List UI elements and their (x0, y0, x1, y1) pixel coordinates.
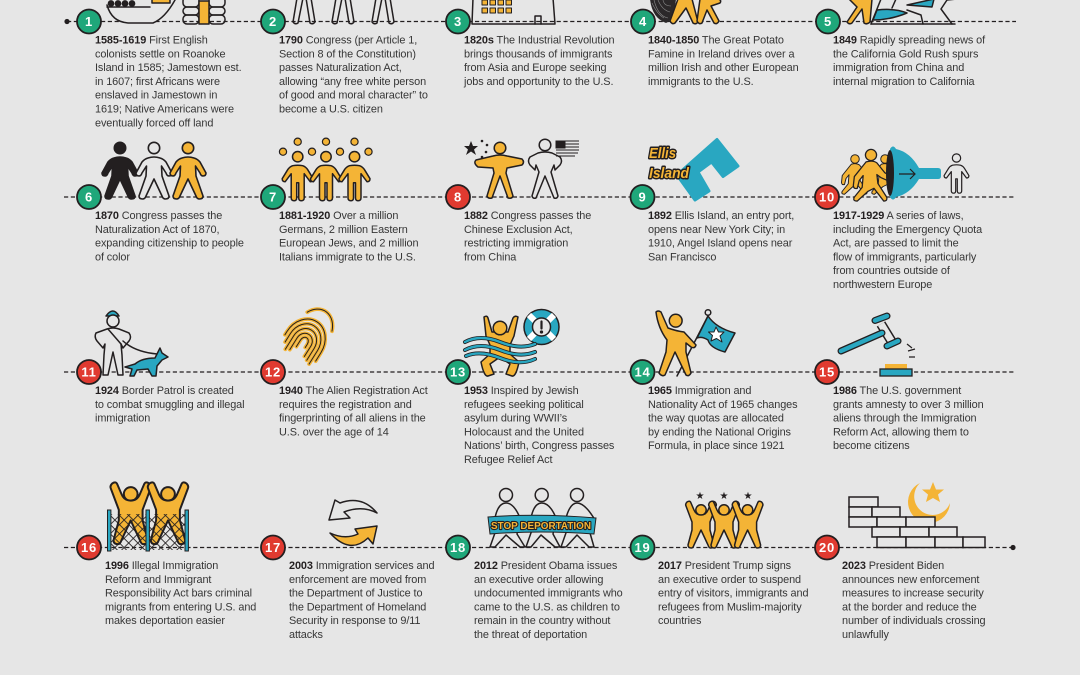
text: 1790: allowing “any free white person (279, 76, 426, 88)
text: 1881-1920: Germans, 2 million Eastern (279, 224, 408, 236)
number marker 12: 12 (265, 364, 281, 380)
icon: swimmer and lifebuoy (465, 310, 559, 376)
text: 1917-1929: including the Emergency Quota (833, 224, 983, 236)
text: 2012: undocumented immigrants who (474, 588, 623, 600)
text: 1996: Reform and Immigrant (105, 574, 211, 586)
text: 1965: 1965 Immigration and (648, 385, 751, 397)
text: 1585-1619: eventually forced off land (95, 117, 213, 129)
text: 1881-1920: 1881-1920 Over a million (279, 210, 398, 222)
number marker 17 (261, 536, 285, 560)
icon: potato blight and walkers (650, 0, 721, 24)
text: 1940: requires the registration and (279, 399, 412, 411)
icon: border patrol and dog (95, 311, 168, 376)
number marker 2 (261, 10, 285, 34)
icon: three people with stars (686, 491, 763, 548)
number marker 6 (77, 185, 101, 209)
text: 1585-1619: in 1607; first Africans were (95, 76, 220, 88)
number marker 3: 3 (454, 14, 462, 29)
text: 1996: Responsibility Act bars criminal (105, 588, 252, 600)
text: 2003: 2003 Immigration services and (289, 560, 434, 572)
text: 2023: 2023 President Biden (842, 560, 944, 572)
text: 1986: become citizens (833, 440, 910, 452)
number marker 5 (816, 10, 840, 34)
icon: gavel (841, 316, 915, 376)
text: 2003: attacks (289, 629, 323, 641)
panel: event 1 (77, 0, 242, 129)
text: 1820s: 1820s The Industrial Revolution (464, 34, 614, 46)
number marker 6: 6 (85, 190, 93, 204)
text: 1924: to combat smuggling and illegal (95, 399, 244, 411)
icon: immigrants through a funnel (842, 146, 969, 201)
text: 2023: at the border and reduce the (842, 601, 977, 613)
icon: ship and crates (107, 0, 225, 24)
text: 1917-1929: from countries outside of (833, 265, 951, 277)
text: 1849: immigration from China and (833, 62, 964, 74)
number marker 15 (815, 360, 839, 384)
number marker 20 (815, 536, 839, 560)
text: 1790: passes Naturalization Act, (279, 62, 402, 74)
text: 1840-1850: immigrants to the U.S. (648, 76, 754, 88)
panel: event 11 (77, 311, 244, 425)
number marker 11: 11 (81, 364, 97, 380)
text: 2012: came to the U.S. as children to (474, 601, 620, 613)
text: 1820s: jobs and opportunity to the U.S. (463, 76, 613, 88)
icon: Ellis Island: Ellis (649, 145, 676, 162)
panel: event 9 (630, 140, 794, 263)
panel: event 12 (261, 300, 428, 438)
number marker 3 (446, 10, 470, 34)
text: 1820s: from Asia and Europe seeking (464, 62, 607, 74)
number marker 19: 19 (634, 540, 651, 555)
panel: event 13 (446, 310, 615, 466)
number marker 18 (446, 536, 470, 560)
icon: crowd (279, 138, 372, 201)
text: 1585-1619: enslaved in Jamestown in (95, 90, 217, 102)
text: 1924: 1924 Border Patrol is created (95, 385, 234, 397)
timeline row 3 (64, 371, 1016, 373)
text: 1790: 1790 Congress (per Article 1, (279, 34, 417, 46)
text: 1917-1929: 1917-1929 A series of laws, (833, 210, 964, 222)
text: 1940: 1940 The Alien Registration Act (279, 385, 428, 397)
panel: event 17 (261, 500, 434, 641)
text: 1881-1920: Italians immigrate to the U.S. (279, 251, 416, 263)
icon: factory (472, 0, 555, 24)
text: 1917-1929: flow of immigrants, particularly (833, 251, 977, 263)
panel: event 5 (816, 0, 986, 88)
number marker 4 (631, 10, 655, 34)
panel: event 3 (446, 0, 615, 88)
panel: event 6 (77, 142, 244, 263)
number marker 8 (446, 185, 470, 209)
text: 2003: enforcement are moved from (289, 574, 426, 586)
number marker 14 (630, 360, 654, 384)
text: 1892: 1892 Ellis Island, an entry port, (648, 210, 794, 222)
text: 1892: San Francisco (648, 251, 716, 263)
text: 1585-1619: 1619; Native Americans were (95, 104, 234, 116)
text: 1585-1619: colonists settle on Roanoke (95, 48, 226, 60)
text: 2012: an executive order allowing (474, 574, 603, 586)
number marker 20: 20 (819, 540, 835, 555)
panel: event 19 (630, 491, 808, 627)
text: 2012: 2012 President Obama issues (474, 560, 617, 572)
text: 1996: migrants from entering U.S. and (105, 601, 256, 613)
text: 1996: 1996 Illegal Immigration (105, 560, 218, 572)
icon: Ellis Island (649, 140, 738, 200)
panel: event 18 (446, 488, 623, 641)
number marker 10 (815, 185, 839, 209)
number marker 9: 9 (638, 190, 647, 204)
text: 1849: internal migration to California (833, 76, 976, 88)
text: 1790: Section 8 of the Constitution) (279, 48, 416, 60)
text: 1849: the California Gold Rush spurs (833, 48, 979, 60)
text: 1790: of good and moral character” to (279, 90, 428, 102)
text: 1986: 1986 The U.S. government (833, 385, 961, 397)
text: 1986: grants amnesty to over 3 million (833, 399, 984, 411)
number marker 13: 13 (450, 364, 466, 380)
text: 2012: the threat of deportation (474, 629, 587, 641)
icon: people behind fence (108, 482, 188, 551)
icon: gold rush (847, 0, 957, 24)
text: 1882: 1882 Congress passes the (464, 210, 591, 222)
text: 1585-1619: Island in 1585; Jamestown est. (95, 62, 242, 74)
text: 1917-1929: Act, are passed to limit the (833, 238, 959, 250)
text: 1940: fingerprinting of all aliens in the (279, 413, 426, 425)
text: 1881-1920: European Jews, and 2 million (279, 238, 419, 250)
icon: protest banner (488, 488, 596, 547)
icon: Ellis Island: Island (649, 165, 690, 182)
text: 1917-1929: northwestern Europe (833, 279, 932, 291)
text: 1870: 1870 Congress passes the (95, 210, 222, 222)
text: 1953: Nations’ birth, Congress passes (464, 440, 615, 452)
text: 1882: Chinese Exclusion Act, (464, 224, 573, 236)
text: 2017: refugees from Muslim-majority (658, 601, 802, 613)
number marker 13 (446, 360, 470, 384)
text: 1870: Naturalization Act of 1870, (95, 224, 220, 236)
text: 1840-1850: million Irish and other European (648, 62, 799, 74)
icon: fingerprint (279, 300, 341, 366)
text: 2023: announces new enforcement (842, 574, 979, 586)
number marker 7 (261, 185, 285, 209)
text: 1840-1850: Famine in Ireland drives over a (648, 48, 795, 60)
icon: person with flag (656, 310, 735, 376)
icon: three people with stars: ★ (696, 491, 705, 502)
text: 1870: expanding citizenship to people (95, 238, 244, 250)
icon: three people (102, 142, 206, 199)
text: 1965: the way quotas are allocated (648, 413, 784, 425)
icon: protest banner: STOP DEPORTATION (491, 521, 591, 532)
text: 1892: 1910, Angel Island opens near (648, 238, 793, 250)
text: 2023: number of individuals crossing (842, 615, 986, 627)
text: 1986: Reform Act, allowing them to (833, 426, 969, 438)
number marker 1 (77, 10, 101, 34)
number marker 2: 2 (269, 14, 277, 29)
icon: swap arrows (329, 500, 377, 545)
text: 1965: Nationality Act of 1965 changes (648, 399, 798, 411)
text: 2017: 2017 President Trump signs (658, 560, 791, 572)
timeline row 1 (64, 19, 1016, 24)
panel: event 7 (261, 138, 419, 263)
text: 1840-1850: 1840-1850 The Great Potato (648, 34, 784, 46)
number marker 16: 16 (81, 540, 97, 555)
timeline row 2 (64, 196, 1016, 198)
text: 2003: the Department of Homeland (289, 601, 426, 613)
text: 1986: aliens through the Immigration (833, 413, 977, 425)
text: 1892: opens near New York City; in (648, 224, 785, 236)
text: 1882: from China (464, 251, 517, 263)
number marker 4: 4 (639, 14, 647, 29)
number marker 5: 5 (824, 14, 832, 29)
number marker 18: 18 (450, 540, 466, 555)
number marker 15: 15 (819, 364, 835, 380)
number marker 12 (261, 360, 285, 384)
text: 2017: entry of visitors, immigrants and (658, 588, 808, 600)
text: 2003: Security in response to 9/11 (289, 615, 420, 627)
text: 1953: asylum during WWII’s (464, 413, 568, 425)
number marker 10: 10 (819, 190, 835, 204)
text: 1870: of color (95, 251, 130, 263)
panel: event 10 (815, 146, 983, 291)
text: 1585-1619: 1585-1619 First English (95, 34, 208, 46)
text: 1924: immigration (95, 413, 150, 425)
text: 2017: countries (658, 615, 702, 627)
text: 1849: 1849 Rapidly spreading news of (833, 34, 985, 46)
number marker 9 (630, 185, 654, 209)
panel: event 2 (261, 0, 428, 116)
icon: people legs (293, 0, 394, 24)
number marker 17: 17 (265, 540, 281, 555)
panel: event 15 (815, 316, 984, 452)
panel: event 8 (446, 139, 591, 263)
text: 2012: remain in the country without (474, 615, 610, 627)
text: 2017: an executive order to suspend (658, 574, 801, 586)
text: 1953: Holocaust and the United (464, 426, 584, 438)
number marker 14: 14 (634, 364, 651, 380)
number marker 16 (77, 536, 101, 560)
panel: event 4 (631, 0, 799, 88)
text: 1953: 1953 Inspired by Jewish (464, 385, 579, 397)
text: 1790: become a U.S. citizen (279, 104, 383, 116)
timeline row 4 (64, 545, 1016, 550)
text: 1965: Formula, in place since 1921 (648, 440, 784, 452)
number marker 7: 7 (269, 190, 277, 204)
text: 2023: unlawfully (842, 629, 889, 641)
text: 1953: refugees seeking political (464, 399, 584, 411)
text: 1996: makes deportation easier (105, 615, 225, 627)
text: 2023: measures to increase security (842, 588, 984, 600)
text: 1820s: brings thousands of immigrants (464, 48, 613, 60)
number marker 11 (77, 360, 101, 384)
panel: event 16 (77, 482, 256, 627)
icon: China and US figures (464, 139, 579, 198)
number marker 1: 1 (85, 14, 93, 29)
text: 1965: by ending the National Origins (648, 426, 792, 438)
text: 1940: U.S. over the age of 14 (279, 426, 389, 438)
text: 1882: restricting immigration (464, 238, 568, 250)
panel: event 14 (630, 310, 798, 452)
text: 1953: Refugee Relief Act (464, 454, 552, 466)
icon: three people with stars: ★ (744, 491, 753, 502)
number marker 19 (630, 536, 654, 560)
icon: wall with crescent and star (849, 482, 985, 548)
number marker 8: 8 (454, 190, 462, 204)
icon: three people with stars: ★ (720, 491, 729, 502)
panel: event 20 (815, 482, 986, 641)
text: 2003: the Department of Justice to (289, 588, 422, 600)
